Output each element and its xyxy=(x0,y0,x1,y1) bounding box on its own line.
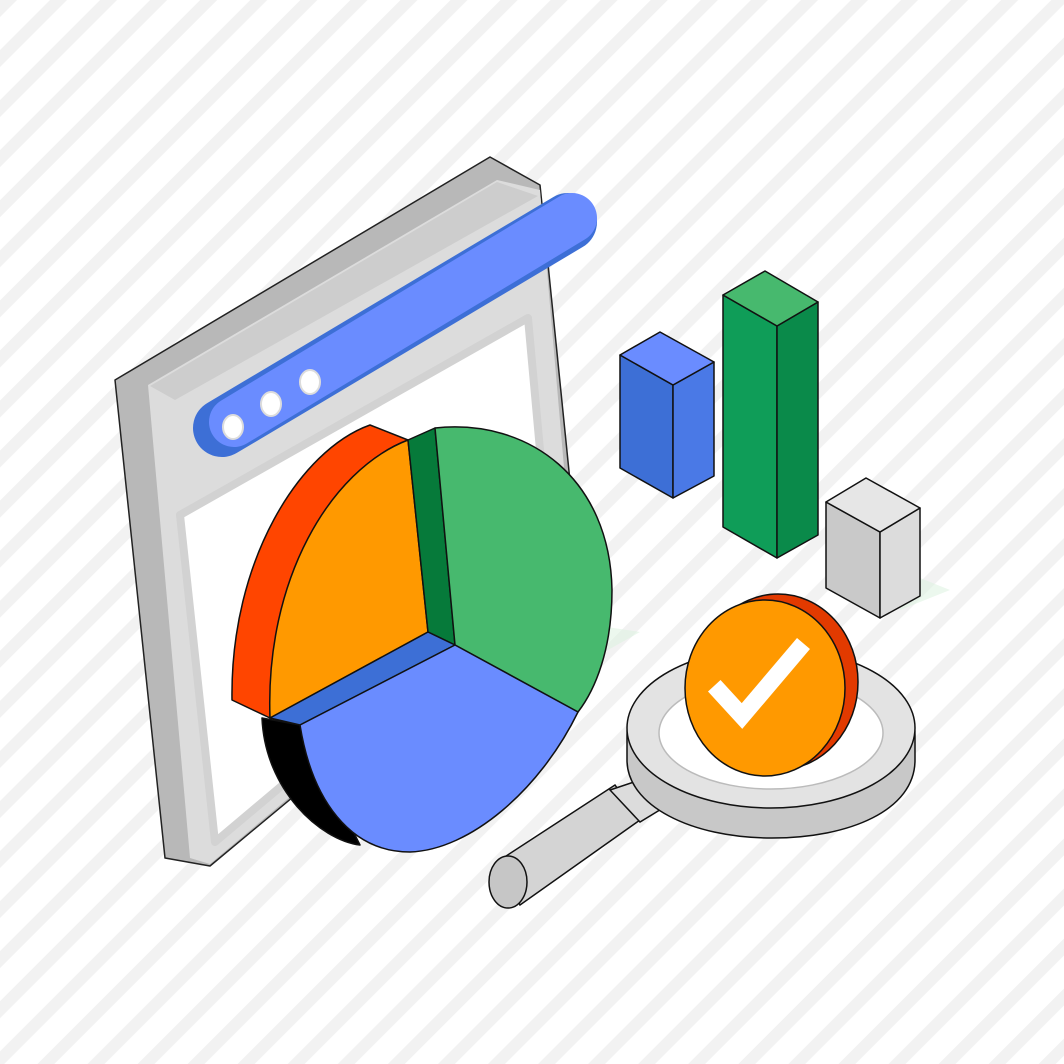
handle xyxy=(489,775,668,908)
black base xyxy=(262,718,360,845)
checkmark xyxy=(720,650,798,716)
orange face xyxy=(270,440,428,718)
blue edge xyxy=(270,632,455,725)
magnifying glass xyxy=(489,648,915,908)
shadows xyxy=(560,570,950,660)
green bar xyxy=(723,271,818,558)
browser window xyxy=(115,157,578,866)
gray bar xyxy=(826,478,920,618)
blue face xyxy=(300,645,578,852)
orange side (red) xyxy=(232,425,408,718)
check coin xyxy=(685,594,858,776)
title bar xyxy=(222,218,572,428)
inner content area xyxy=(180,318,550,842)
pie chart xyxy=(232,425,612,852)
bar chart xyxy=(620,271,920,618)
ring xyxy=(627,650,915,838)
green dark edge xyxy=(408,428,455,645)
window dots xyxy=(223,370,320,439)
blue bar xyxy=(620,332,714,498)
green face xyxy=(435,427,612,712)
